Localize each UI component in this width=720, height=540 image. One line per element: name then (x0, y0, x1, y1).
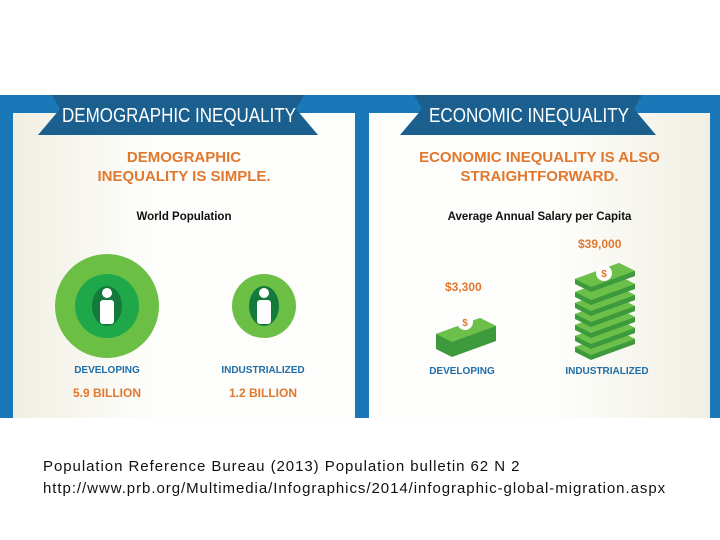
blue background band (0, 95, 720, 418)
label: industrialized: INDUSTRIALIZED (565, 366, 649, 377)
label: industrialized: INDUSTRIALIZED (221, 365, 305, 376)
chart label: Average Annual Salary per Capita (448, 211, 631, 223)
label: developing: 5.9 BILLION (73, 386, 141, 400)
label: developing: DEVELOPING (429, 366, 495, 377)
icon: industrialized population circle (232, 274, 296, 338)
icon: money stacks (436, 263, 635, 360)
source citation: http://www.prb.org/Multimedia/Infographics/2014/infographic-global-migration.aspx (43, 480, 666, 497)
subtitle (419, 149, 660, 185)
source citation (43, 458, 666, 497)
label: industrialized: 1.2 BILLION (229, 386, 297, 400)
label: developing: DEVELOPING (74, 365, 140, 376)
source citation: Population Reference Bureau (2013) Population bulletin 62 N 2 (43, 458, 520, 475)
subtitle (97, 149, 271, 185)
icon: money stacks: $ (462, 318, 468, 329)
icon: developing population circle (55, 254, 159, 358)
subtitle: INEQUALITY IS SIMPLE. (97, 168, 271, 185)
banner: economic inequality (400, 95, 656, 135)
value: 39000: $39,000 (578, 237, 621, 251)
icon: money stacks: $ (601, 269, 607, 280)
value: 3300: $3,300 (445, 280, 482, 294)
subtitle: STRAIGHTFORWARD. (460, 168, 619, 185)
banner: demographic inequality (38, 95, 318, 135)
subtitle: ECONOMIC INEQUALITY IS ALSO (419, 149, 660, 166)
panel: demographic inequality (13, 113, 355, 418)
panel: economic inequality (369, 113, 710, 418)
label: developing (73, 365, 141, 400)
label: industrialized (221, 365, 305, 400)
subtitle: DEMOGRAPHIC (127, 149, 241, 166)
chart label: World Population (136, 211, 231, 223)
